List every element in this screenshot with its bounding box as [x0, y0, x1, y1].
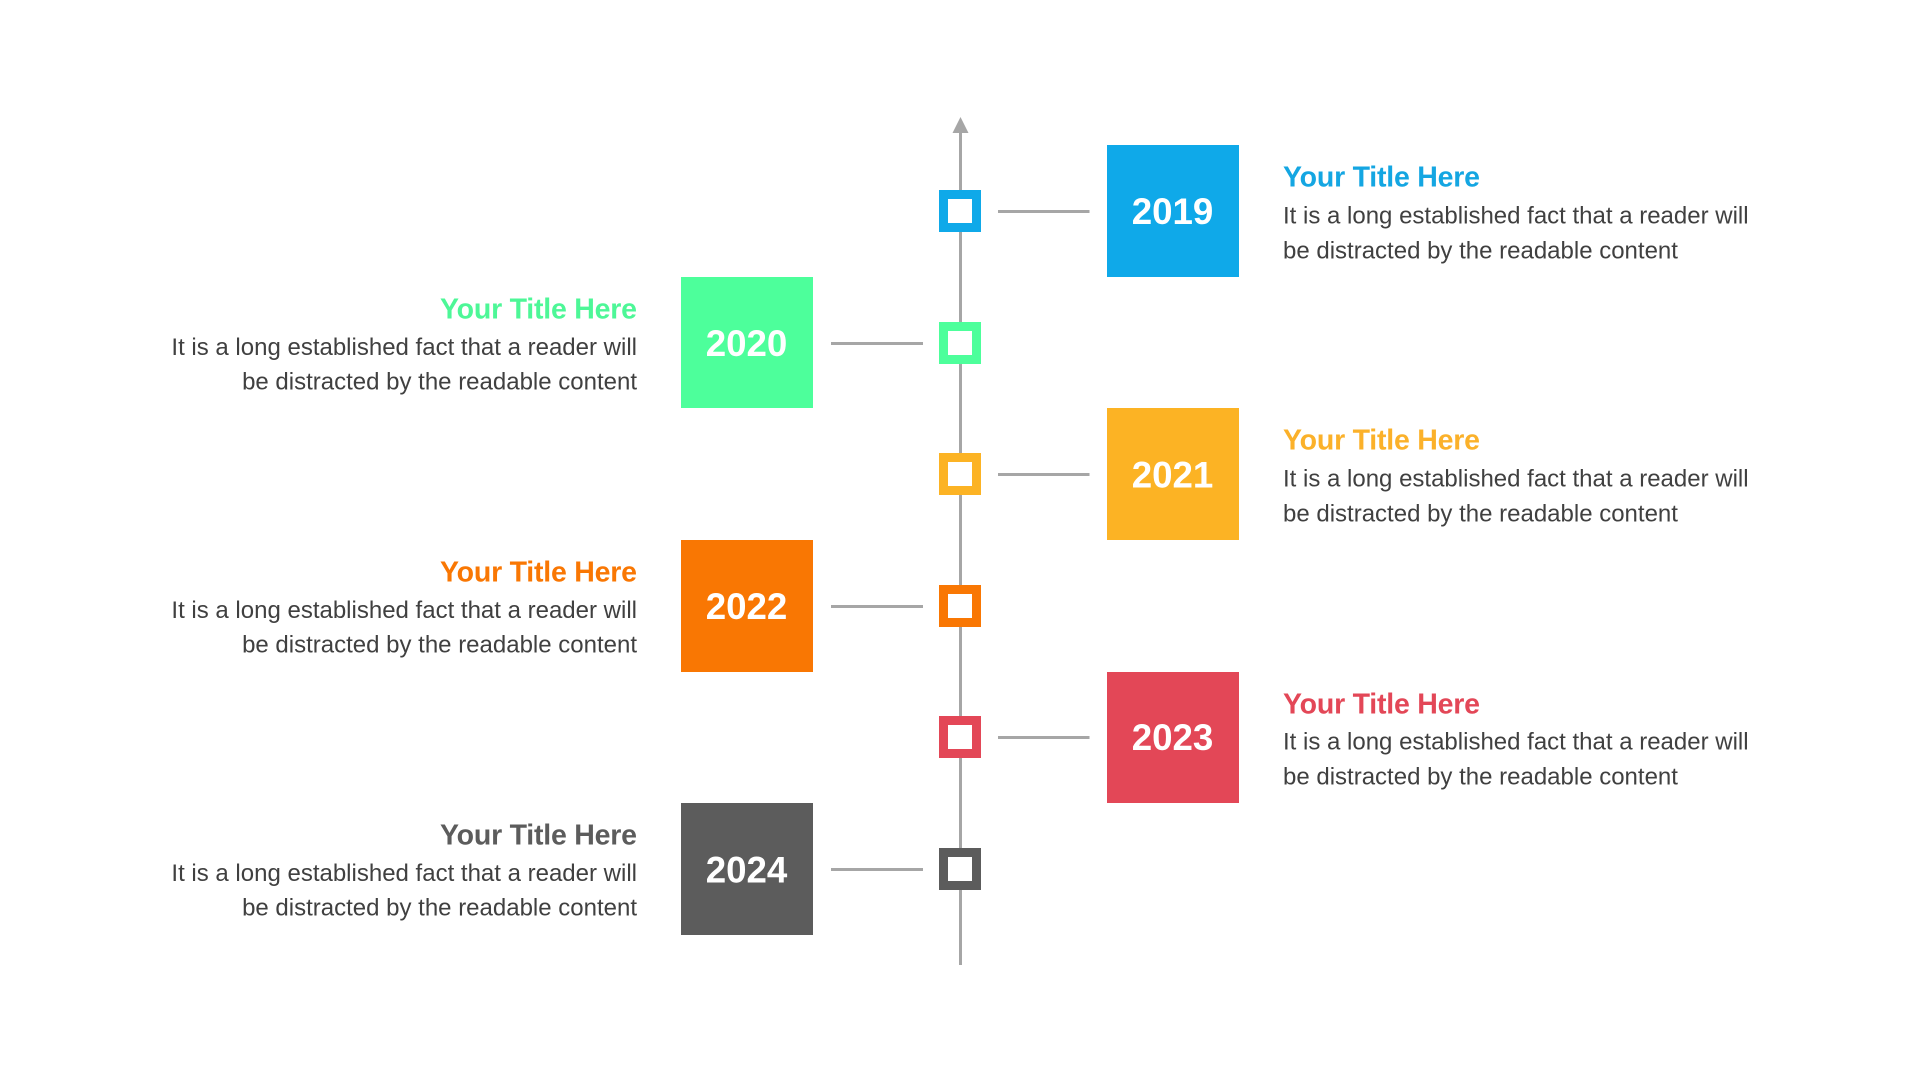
text block 2022: be distracted by the readable content	[242, 632, 637, 658]
year box 2024	[681, 803, 813, 935]
node 2022	[944, 590, 976, 622]
text block 2022: Your Title Here	[440, 557, 637, 589]
text block 2019	[1283, 162, 1749, 264]
node 2019	[944, 194, 976, 228]
text block 2021: Your Title Here	[1283, 425, 1480, 457]
text block 2020	[171, 294, 637, 396]
connector 2023	[998, 736, 1090, 739]
connector 2024	[831, 868, 923, 871]
milestone 2022	[171, 540, 976, 672]
connector 2019	[998, 210, 1090, 213]
text block 2024: It is a long established fact that a reader will	[171, 860, 637, 887]
node 2023	[944, 720, 976, 754]
year box 2021	[1107, 408, 1239, 540]
year box 2022: 2022	[706, 586, 787, 627]
milestone 2023	[944, 672, 1749, 803]
text block 2024: Your Title Here	[440, 820, 637, 852]
text block 2024	[171, 820, 637, 922]
milestone 2020	[171, 277, 976, 408]
year box 2020	[681, 277, 813, 408]
year box 2023: 2023	[1132, 717, 1213, 758]
connector 2022	[831, 605, 923, 608]
text block 2021: It is a long established fact that a reader will	[1283, 466, 1749, 492]
year box 2019: 2019	[1132, 191, 1213, 232]
text block 2020: Your Title Here	[440, 294, 637, 326]
year box 2020: 2020	[706, 323, 787, 364]
connector 2020	[831, 342, 923, 345]
text block 2019: Your Title Here	[1283, 162, 1480, 194]
node 2024	[944, 852, 976, 886]
text block 2020: be distracted by the readable content	[242, 368, 637, 396]
text block 2019: It is a long established fact that a reader will	[1283, 202, 1749, 230]
text block 2023: Your Title Here	[1283, 688, 1480, 720]
text block 2021	[1283, 425, 1749, 528]
year box 2024: 2024	[706, 850, 788, 890]
text block 2024: be distracted by the readable content	[242, 894, 637, 922]
node 2020	[944, 326, 976, 360]
connector 2021	[998, 473, 1090, 476]
text block 2021: be distracted by the readable content	[1283, 500, 1678, 528]
milestone 2024	[171, 803, 976, 935]
text block 2019: be distracted by the readable content	[1283, 238, 1678, 264]
text block 2020: It is a long established fact that a reader will	[171, 334, 637, 361]
milestone 2021	[944, 408, 1749, 540]
text block 2023	[1283, 688, 1749, 790]
text block 2022	[171, 557, 637, 658]
vertical timeline axis with arrow	[952, 117, 968, 965]
year box 2021: 2021	[1132, 455, 1213, 496]
text block 2023: It is a long established fact that a reader will	[1283, 728, 1749, 756]
text block 2023: be distracted by the readable content	[1283, 764, 1678, 790]
milestone 2019	[944, 145, 1749, 277]
text block 2022: It is a long established fact that a reader will	[171, 597, 637, 624]
year box 2022	[681, 540, 813, 672]
node 2021	[944, 458, 976, 490]
year box 2023	[1107, 672, 1239, 803]
year box 2019	[1107, 145, 1239, 277]
